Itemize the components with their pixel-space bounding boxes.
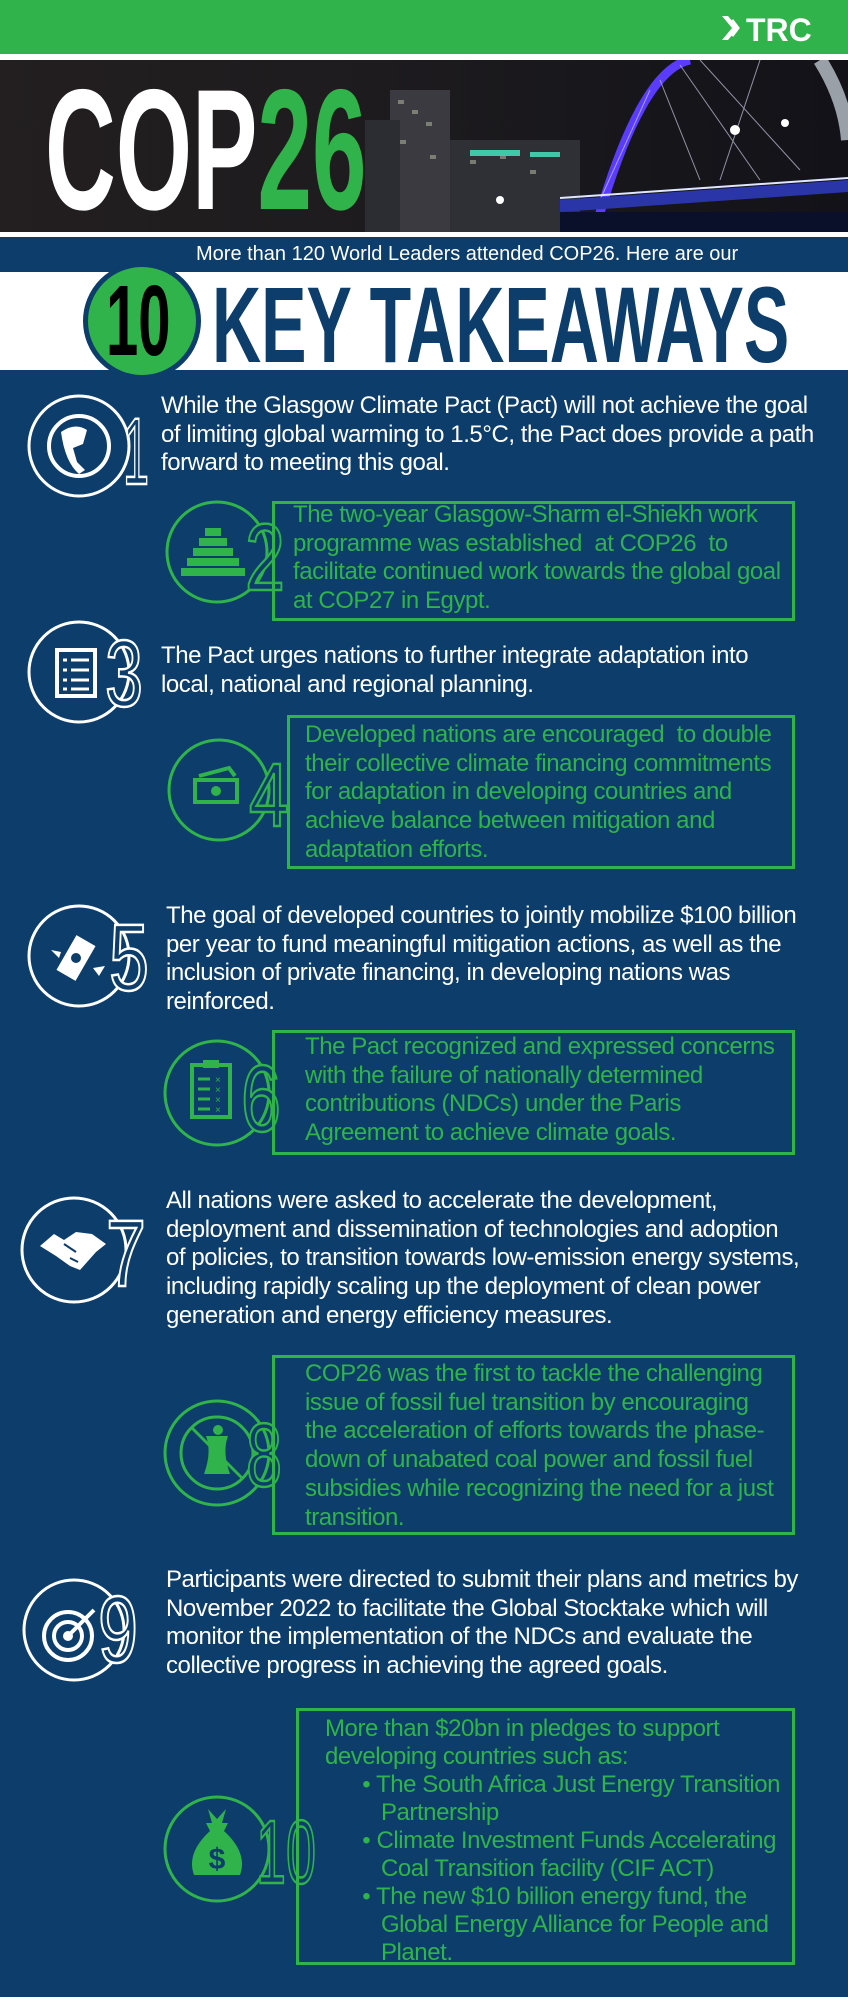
item 7: [20, 1187, 799, 1329]
text: The Pact urges nations to further integrate adaptation into: [161, 642, 748, 669]
icon: handshake 7: 7: [106, 1201, 146, 1307]
icon: handshake 7: [20, 1196, 146, 1307]
text: of limiting global warming to 1.5°C, the Pact does provide a path: [161, 421, 814, 448]
text: of policies, to transition towards low-emission energy systems,: [166, 1244, 799, 1271]
text: generation and energy efficiency measures.: [166, 1302, 612, 1329]
item 8: transition.: [305, 1504, 404, 1531]
box: [272, 501, 795, 621]
logo: TRC: TRC: [746, 12, 812, 48]
text: [166, 1566, 798, 1679]
item 8: down of unabated coal power and fossil fuel: [305, 1446, 753, 1473]
icon: checklist 3: 3: [105, 621, 143, 727]
text: [161, 642, 748, 698]
text: inclusion of private financing, in developing nations was: [166, 959, 730, 986]
text: [166, 902, 796, 1015]
item 10: Coal Transition facility (CIF ACT): [381, 1855, 714, 1882]
item 10: [164, 1708, 795, 1966]
item 6: contributions (NDCs) under the Paris: [305, 1090, 681, 1117]
item 9: [22, 1566, 798, 1683]
item 5: [28, 902, 796, 1015]
icon: clipboard 6: [164, 1040, 281, 1152]
item 8: the acceleration of efforts towards the phase-: [305, 1417, 764, 1444]
icon: flying money 5: [28, 904, 149, 1011]
item 10: • The new $10 billion energy fund, the: [362, 1883, 747, 1910]
text: forward to meeting this goal.: [161, 449, 449, 476]
text: per year to fund meaningful mitigation actions, as well as the: [166, 931, 781, 958]
icon: money 4: [168, 738, 289, 846]
item 10: • Climate Investment Funds Accelerating: [362, 1827, 776, 1854]
text: deployment and dissemination of technologies and adoption: [166, 1216, 778, 1243]
icon: clipboard 6: ×: [215, 1075, 221, 1086]
item 4: achieve balance between mitigation and: [305, 807, 715, 834]
text: All nations were asked to accelerate the development,: [166, 1187, 717, 1214]
item 8: issue of fossil fuel transition by encouraging: [305, 1389, 749, 1416]
icon: green circle 10: 10: [106, 265, 171, 377]
item 10: Global Energy Alliance for People and: [381, 1911, 769, 1938]
icon: flying money 5: 5: [109, 905, 149, 1011]
item 4: adaptation efforts.: [305, 836, 488, 863]
text: including rapidly scaling up the deployment of clean power: [166, 1273, 760, 1300]
item 8: subsidies while recognizing the need for a just: [305, 1475, 773, 1502]
item 4: for adaptation in developing countries and: [305, 778, 732, 805]
icon: clipboard 6: ×: [215, 1085, 221, 1096]
text: While the Glasgow Climate Pact (Pact) will not achieve the goal: [161, 392, 808, 419]
icon: money bag 10: [164, 1796, 316, 1903]
text: local, national and regional planning.: [161, 671, 534, 698]
heading: 10 key takeaways: [0, 264, 848, 385]
icon: checklist 3: [28, 620, 143, 727]
item 4: Developed nations are encouraged to double: [305, 721, 771, 748]
item 6: with the failure of nationally determined: [305, 1062, 703, 1089]
icon: power plant 8: 8: [246, 1406, 282, 1506]
item 10: More than $20bn in pledges to support: [325, 1715, 719, 1742]
text: monitor the implementation of the NDCs and evaluate the: [166, 1623, 752, 1650]
item 10: • The South Africa Just Energy Transition: [362, 1771, 780, 1798]
text: collective progress in achieving the agreed goals.: [166, 1652, 668, 1679]
item 4: their collective climate financing commitments: [305, 750, 771, 777]
item 2: programme was established at COP26 to: [293, 530, 728, 557]
box: [287, 715, 795, 869]
banner: COP26: [0, 60, 848, 232]
text: [166, 1187, 799, 1329]
subtitle: More than 120 World Leaders attended COP26. Here are our: [196, 243, 738, 265]
box: [272, 1030, 795, 1155]
item 3: [28, 620, 748, 727]
item 6: Agreement to achieve climate goals.: [305, 1119, 676, 1146]
icon: money bag 10: $: [209, 1843, 226, 1876]
icon: globe 1: 1: [123, 399, 149, 505]
text: November 2022 to facilitate the Global Stocktake which will: [166, 1595, 768, 1622]
icon: globe 1: [28, 394, 149, 505]
item 4: [168, 715, 795, 869]
item 10: Planet.: [381, 1939, 453, 1966]
header bar: [0, 0, 848, 54]
icon: pyramid 2: [166, 500, 285, 611]
icon: pyramid 2: 2: [245, 505, 285, 611]
item 2: [166, 500, 795, 621]
box: [272, 1355, 795, 1535]
heading: 10 key takeaways: KEY TAKEAWAYS: [212, 264, 789, 385]
item 2: at COP27 in Egypt.: [293, 587, 490, 614]
item 2: facilitate continued work towards the global goal: [293, 558, 781, 585]
icon: power plant 8: [164, 1400, 282, 1506]
item 8: [164, 1355, 795, 1535]
text: The goal of developed countries to jointly mobilize $100 billion: [166, 902, 796, 929]
text: reinforced.: [166, 988, 274, 1015]
item 6: The Pact recognized and expressed concerns: [305, 1033, 774, 1060]
box: [296, 1708, 795, 1965]
icon: money bag 10: 10: [256, 1803, 316, 1903]
icon: green circle 10: [83, 262, 201, 380]
item 10: developing countries such as:: [325, 1743, 628, 1770]
item 10: Partnership: [381, 1799, 499, 1826]
icon: clipboard 6: 6: [241, 1046, 281, 1152]
text: Participants were directed to submit their plans and metrics by: [166, 1566, 798, 1593]
icon: clipboard 6: ×: [215, 1095, 221, 1106]
icon: target 9: [22, 1577, 138, 1683]
item 2: The two-year Glasgow-Sharm el-Shiekh work: [293, 501, 757, 528]
icon: clipboard 6: ×: [215, 1105, 221, 1116]
item 6: [164, 1030, 795, 1155]
icon: target 9: 9: [98, 1577, 138, 1683]
item 8: COP26 was the first to tackle the challenging: [305, 1360, 762, 1387]
text: [161, 392, 814, 476]
item 1: [28, 392, 814, 505]
icon: money 4: 4: [249, 746, 289, 846]
